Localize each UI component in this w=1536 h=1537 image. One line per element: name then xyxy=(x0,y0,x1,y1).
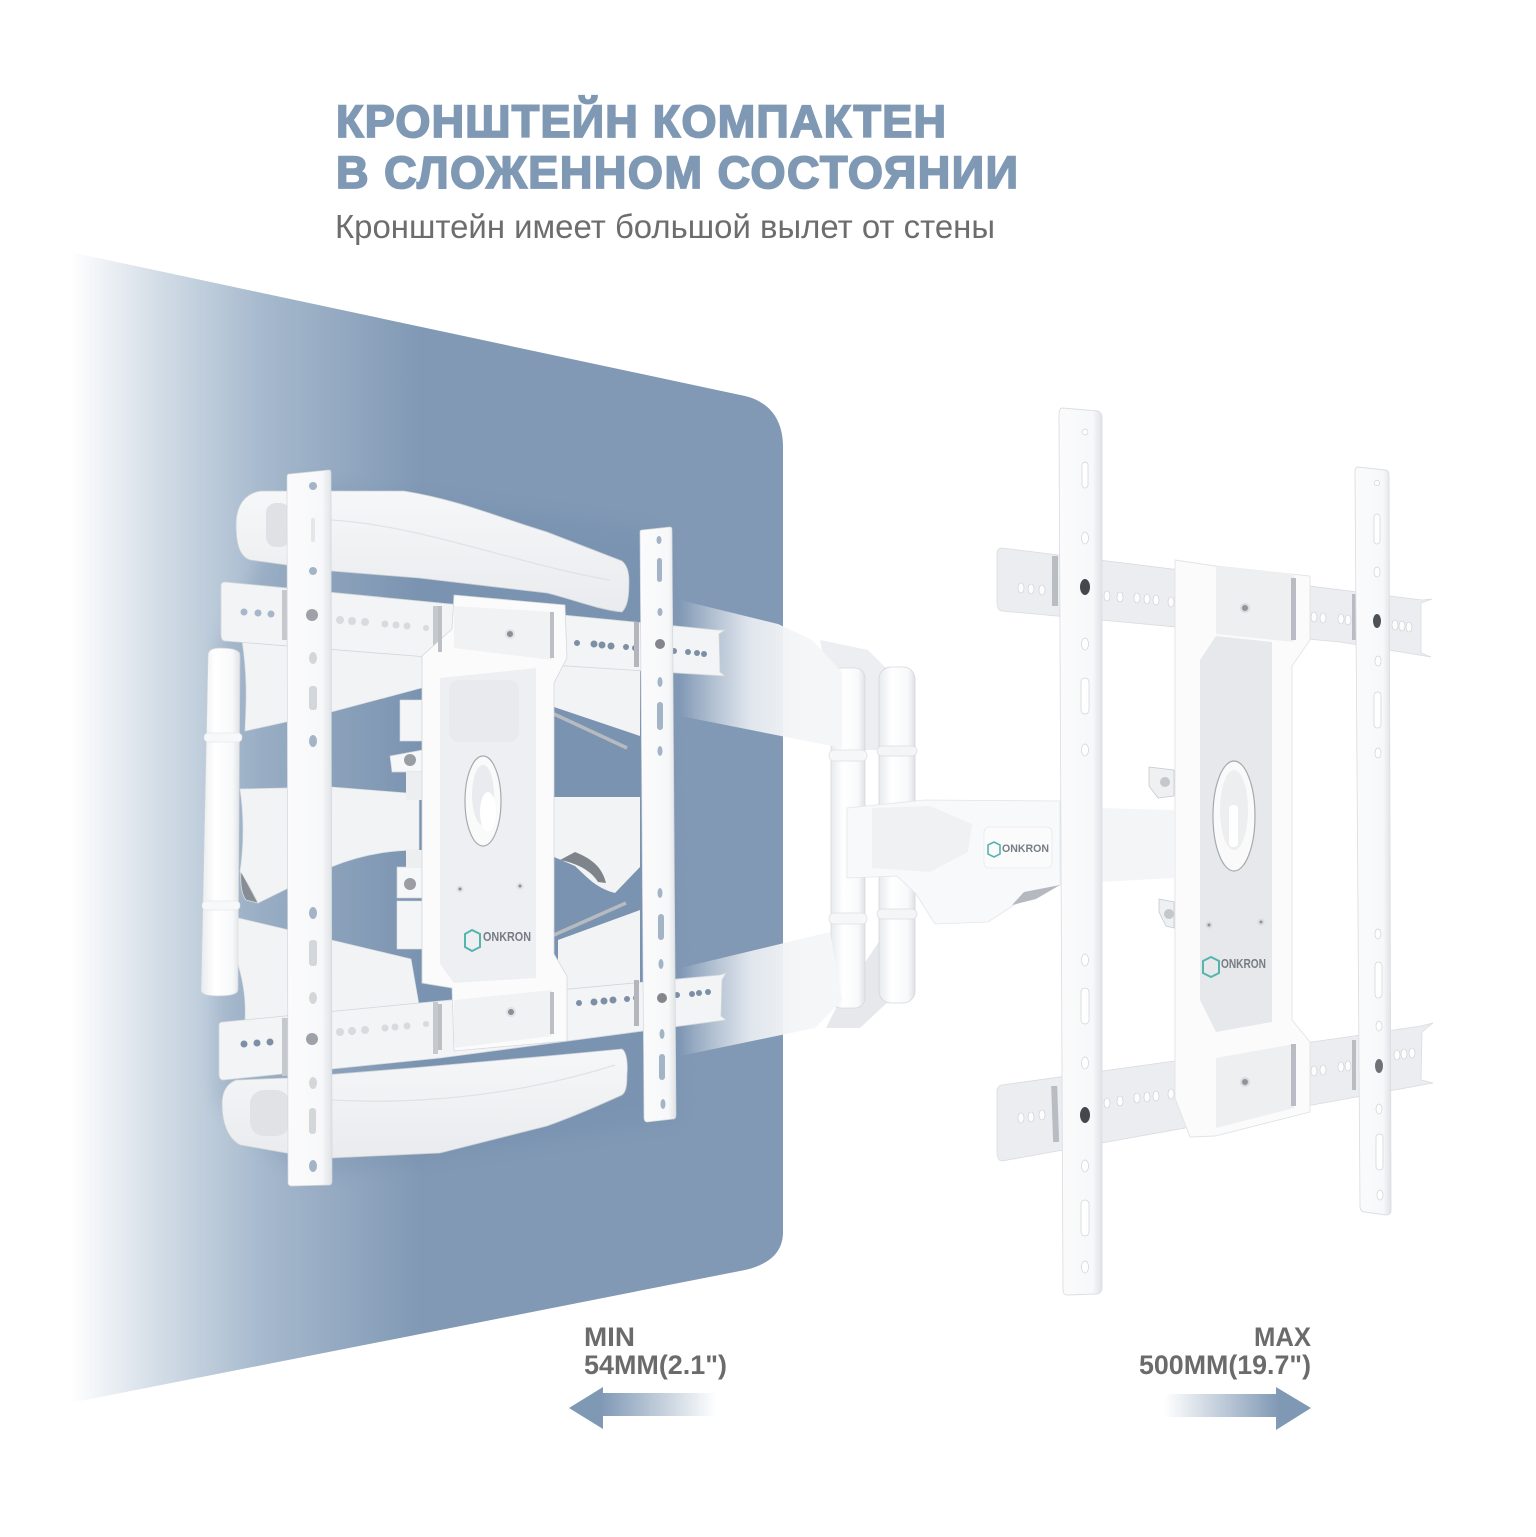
short strip xyxy=(640,527,676,1122)
faded extended arms over the wall edge xyxy=(680,600,842,1056)
lower rail xyxy=(997,1023,1433,1161)
plate logo xyxy=(465,929,531,951)
title: КРОНШТЕЙН КОМПАКТЕН xyxy=(336,96,946,147)
right arms and rods xyxy=(554,650,640,990)
soft shadow of folded bracket xyxy=(215,480,680,1180)
left arms xyxy=(238,640,425,1022)
plate logo: ONKRON xyxy=(1221,956,1266,971)
lower rail xyxy=(219,973,726,1080)
label: min distance: 54MM(2.1") xyxy=(584,1350,727,1380)
lower cover xyxy=(222,1049,627,1158)
long strip xyxy=(287,470,332,1186)
plate logo xyxy=(1203,956,1266,977)
subtitle: Кронштейн имеет большой вылет от стены xyxy=(335,208,995,245)
arrow: left xyxy=(569,1387,716,1429)
oval hub xyxy=(465,756,501,846)
arm logo: ONKRON xyxy=(1002,843,1049,855)
extended arm: horizontal body xyxy=(847,767,1174,928)
centre plate xyxy=(1175,560,1310,1137)
folded bracket on the wall xyxy=(201,470,726,1186)
title: В СЛОЖЕННОМ СОСТОЯНИИ xyxy=(336,147,1018,198)
label: min distance: MIN xyxy=(584,1322,635,1352)
title xyxy=(336,96,1018,198)
upper rail xyxy=(221,582,725,676)
upper rail xyxy=(997,548,1432,657)
label: max distance: MAX xyxy=(1254,1322,1311,1352)
arm logo xyxy=(984,827,1052,868)
left column xyxy=(201,648,242,996)
plate logo: ONKRON xyxy=(483,929,531,944)
upper cover xyxy=(236,491,629,612)
centre plate xyxy=(422,595,567,1051)
long strip xyxy=(1059,408,1102,1295)
arrow: right xyxy=(1164,1387,1311,1430)
centre plate screws xyxy=(1206,604,1264,1086)
hinge tabs and bolts xyxy=(390,700,422,949)
label: min distance xyxy=(584,1322,727,1380)
extended arm: joint cylinders xyxy=(680,600,917,1056)
extended bracket xyxy=(997,408,1433,1295)
label: max distance xyxy=(1139,1322,1311,1380)
wall panel xyxy=(70,252,783,1403)
oval hub xyxy=(1213,761,1255,871)
label: max distance: 500MM(19.7") xyxy=(1139,1350,1311,1380)
plate screws xyxy=(458,630,522,1016)
short strip xyxy=(1355,467,1391,1215)
